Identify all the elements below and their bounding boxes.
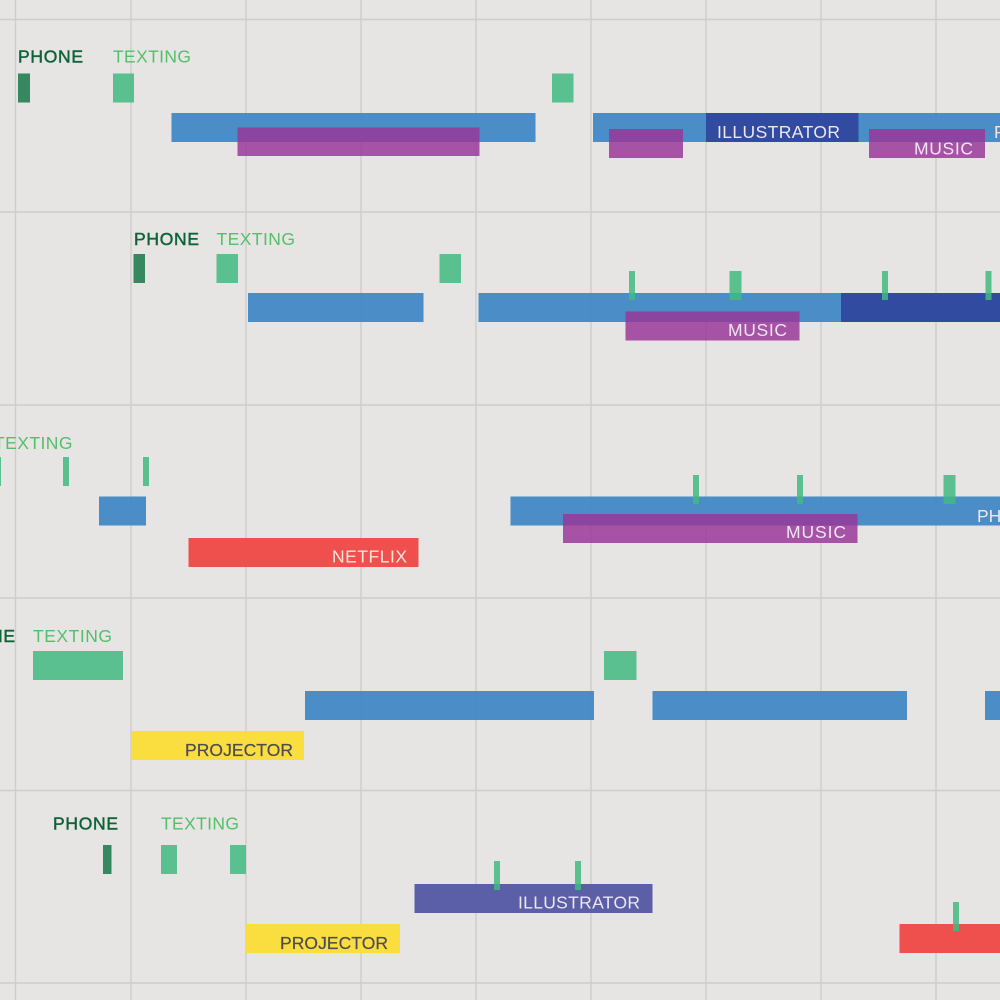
texting bars bbox=[113, 74, 574, 102]
row 3 bbox=[0, 433, 1000, 567]
row 1 bbox=[18, 46, 1000, 158]
texting bars bbox=[33, 651, 636, 680]
music bar: MUSIC bbox=[728, 320, 787, 340]
music bars bbox=[238, 128, 985, 158]
texting ticks right bbox=[693, 475, 956, 504]
texting ticks bbox=[494, 861, 581, 890]
label: texting: TEXTING bbox=[216, 229, 295, 249]
phone bar bbox=[134, 254, 145, 283]
phone bar bbox=[103, 845, 112, 874]
projector bar bbox=[246, 924, 400, 953]
photoshop bars bbox=[305, 691, 1000, 720]
netflix bar bbox=[900, 924, 1000, 953]
netflix bar bbox=[188, 538, 418, 567]
photoshop bars bbox=[99, 496, 1000, 526]
phone bar bbox=[18, 74, 30, 102]
label: phone: PHONE bbox=[18, 46, 83, 66]
photoshop bars bbox=[172, 113, 1000, 142]
label: texting: TEXTING bbox=[161, 814, 239, 834]
label: phone: PHONE bbox=[53, 814, 118, 834]
row 4 bbox=[0, 626, 1000, 760]
texting ticks left bbox=[0, 457, 149, 486]
projector bar: PROJECTOR bbox=[185, 740, 293, 760]
label: phone: PHONE bbox=[134, 229, 199, 249]
music bars: MUSIC bbox=[914, 138, 973, 158]
netflix bar: NETFLIX bbox=[332, 546, 407, 566]
texting tick over netflix bbox=[953, 902, 959, 931]
row 2 bbox=[134, 229, 1000, 340]
illustrator bar bbox=[414, 884, 652, 913]
music bar bbox=[563, 514, 858, 543]
illustrator bar: ILLUSTRATOR bbox=[717, 122, 840, 142]
music bar: MUSIC bbox=[786, 522, 846, 542]
row 5 bbox=[53, 814, 1000, 953]
photoshop bars bbox=[248, 293, 841, 322]
texting ticks bbox=[629, 271, 992, 300]
illustrator bar bbox=[706, 113, 858, 142]
label: texting: TEXTING bbox=[33, 626, 112, 646]
illustrator bar: ILLUSTRATOR bbox=[518, 892, 640, 912]
texting bars bbox=[216, 254, 461, 283]
projector bar bbox=[131, 731, 304, 760]
illustrator bar bbox=[841, 293, 1000, 322]
music bar bbox=[626, 312, 800, 340]
projector bar: PROJECTOR bbox=[280, 933, 388, 953]
label: texting: TEXTING bbox=[113, 46, 191, 66]
texting bars bbox=[161, 845, 246, 874]
